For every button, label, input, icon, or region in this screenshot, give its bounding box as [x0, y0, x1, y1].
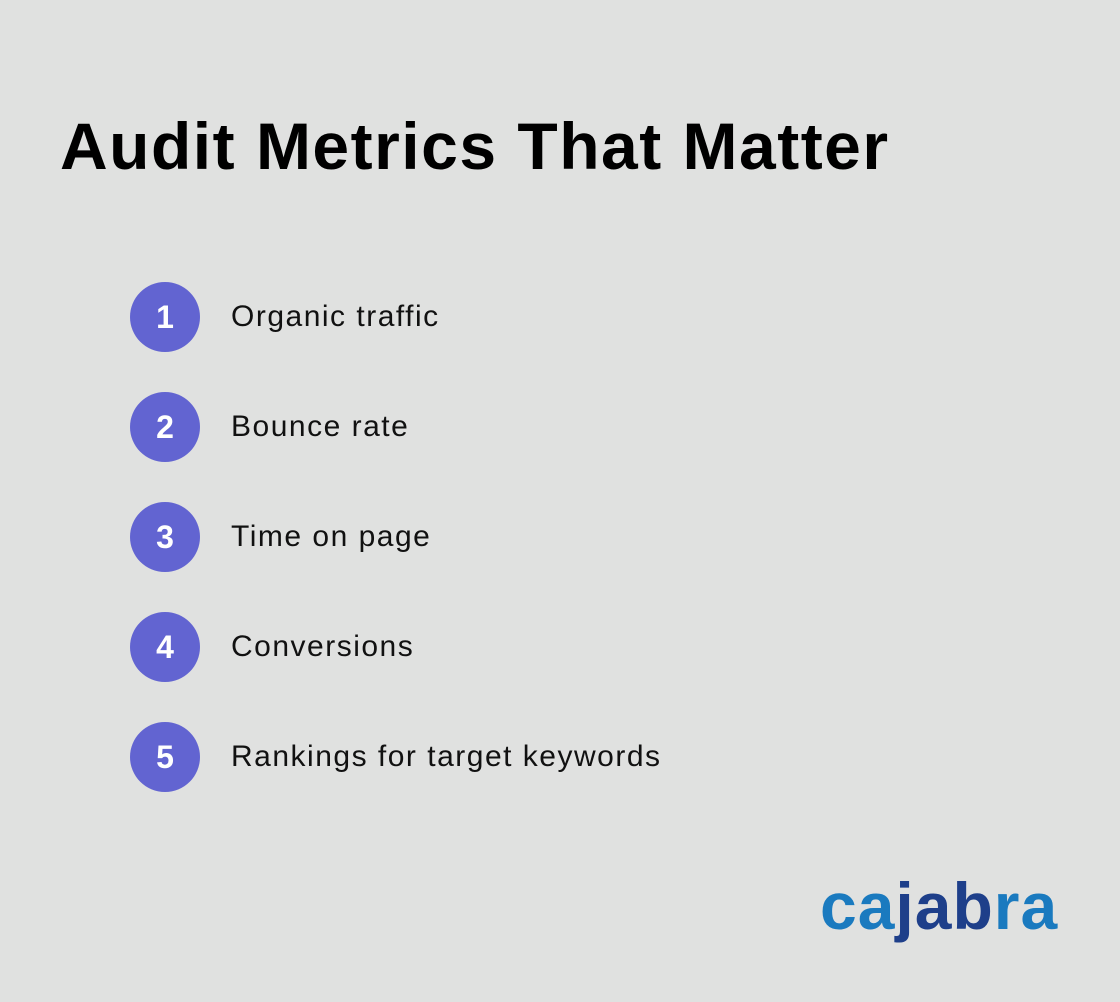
item 3: 3	[156, 519, 174, 555]
item 5: 5	[156, 739, 174, 775]
item 3: Time on page	[231, 520, 431, 553]
item 2	[130, 392, 409, 462]
item 5: Rankings for target keywords	[231, 740, 662, 773]
item 1: Organic traffic	[231, 300, 440, 333]
item 4: 4	[156, 629, 174, 665]
logo: cajabra	[820, 869, 1058, 943]
item 4: Conversions	[231, 630, 414, 663]
item 1: 1	[156, 299, 174, 335]
item 2: 2	[156, 409, 174, 445]
item 5	[130, 722, 662, 792]
item 4	[130, 612, 414, 682]
item 1	[130, 282, 440, 352]
item 3	[130, 502, 431, 572]
item 2: Bounce rate	[231, 410, 409, 443]
title: Audit Metrics That Matter	[60, 109, 890, 183]
